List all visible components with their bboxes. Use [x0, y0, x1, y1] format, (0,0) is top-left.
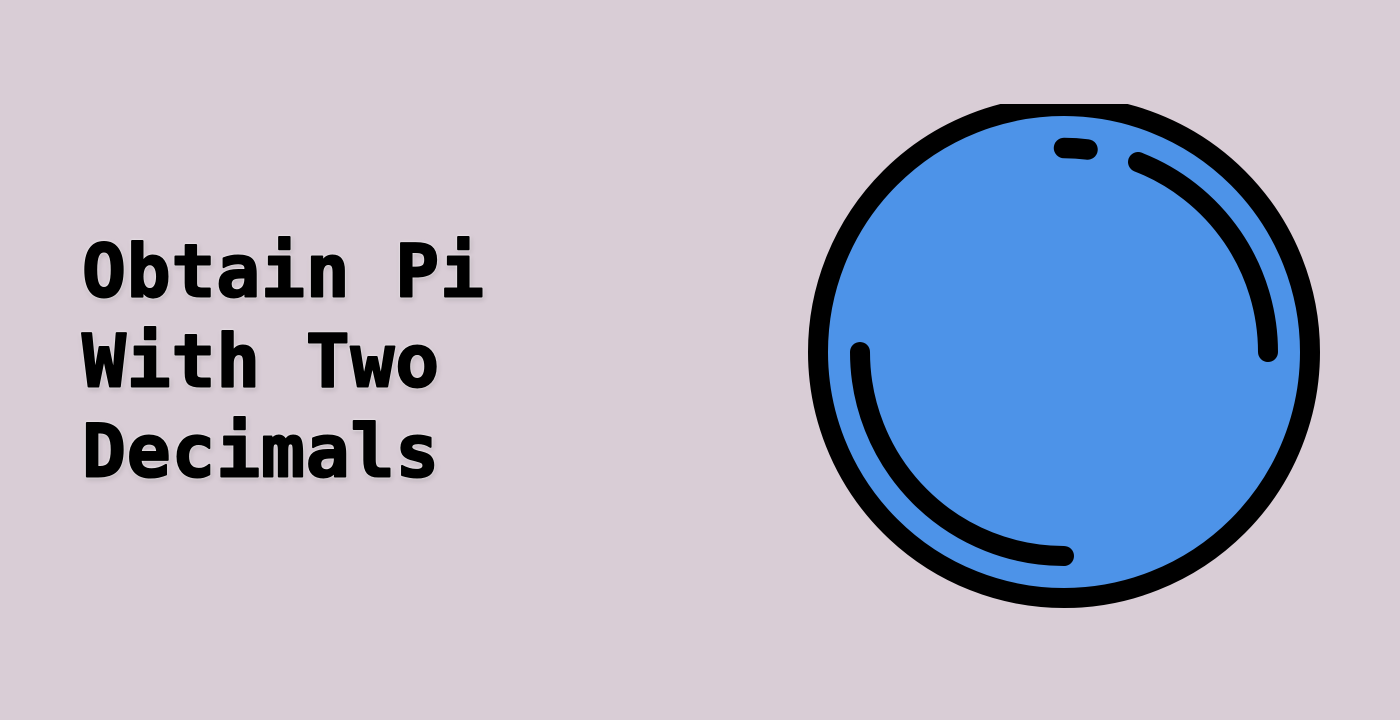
title [82, 230, 485, 494]
highlight: lower left arc [860, 352, 1064, 556]
icon: blue circle [818, 106, 1310, 598]
highlight: upper right arc [1138, 162, 1268, 352]
highlight: short dash [1064, 148, 1088, 150]
title: With Two [82, 320, 440, 404]
title: Decimals [82, 410, 440, 494]
circle body [818, 106, 1310, 598]
title: Obtain Pi [82, 230, 485, 314]
